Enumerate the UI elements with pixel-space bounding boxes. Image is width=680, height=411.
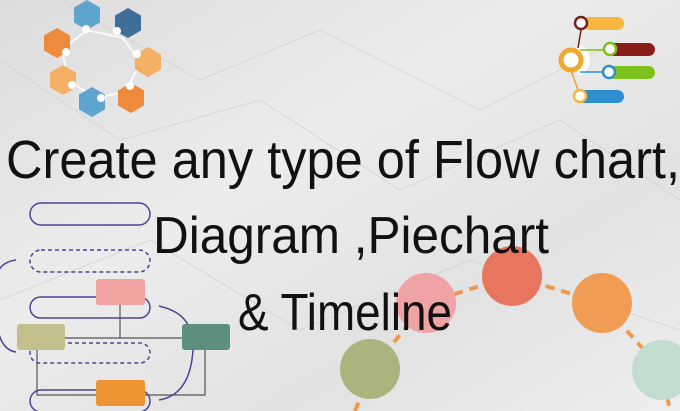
title: & Timeline xyxy=(238,284,452,342)
title: Diagram ,Piechart xyxy=(153,207,550,265)
icon: hexagon network xyxy=(44,0,161,117)
icon: circle timeline xyxy=(340,246,680,411)
icon: flowchart diagram xyxy=(0,203,230,411)
title xyxy=(6,130,680,342)
icon: timeline bars xyxy=(561,17,655,103)
